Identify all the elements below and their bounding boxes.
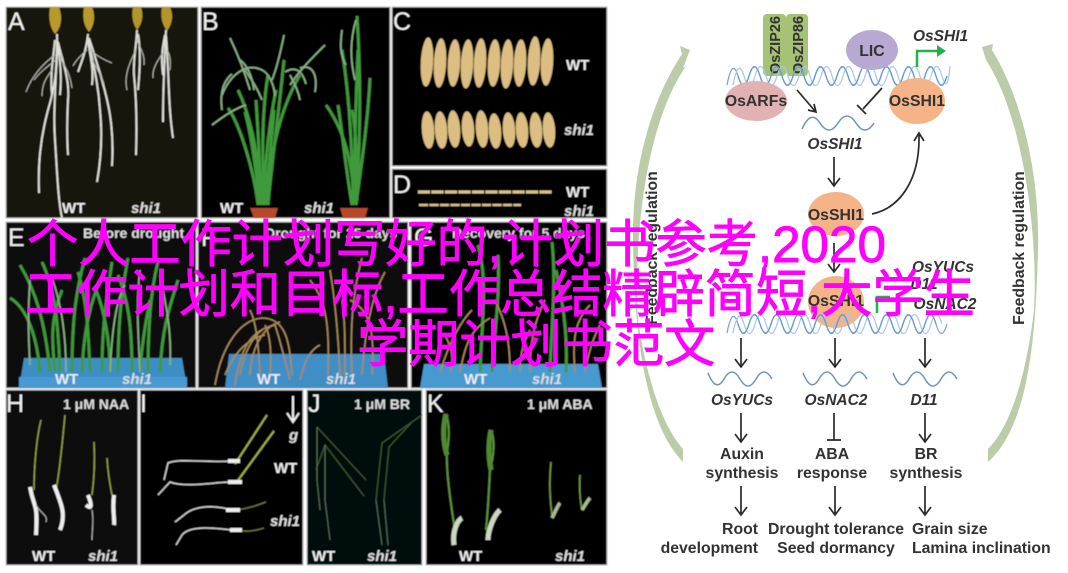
OsSHI1 protein lower (808, 276, 864, 328)
arrow: activation (797, 90, 816, 112)
OsSHI1 protein lower: OsSHI1 (808, 293, 864, 310)
ZIP86 transcription factor (786, 14, 808, 76)
label K: K (427, 390, 444, 418)
label shi1: shi1 (88, 548, 118, 565)
label H: H (6, 390, 24, 418)
label 1 µM BR: 1 μM BR (354, 396, 410, 412)
title overlay (25, 216, 975, 373)
LIC protein (846, 30, 898, 70)
label: Root development: development (661, 540, 759, 557)
label: D11: D11 (910, 392, 938, 409)
panel K: ABA (426, 390, 607, 565)
label C: C (393, 8, 411, 36)
panel E: before drought (6, 222, 196, 388)
arrows: genes to hormones (735, 413, 931, 442)
mRNA wave top (802, 116, 874, 130)
label: BR synthesis: BR (915, 446, 937, 463)
arrows: hormones to traits (735, 486, 931, 515)
label: D11 target: D11 (910, 276, 938, 293)
label F: F (201, 224, 216, 252)
label A: A (8, 8, 25, 36)
label shi1: shi1 (326, 371, 356, 388)
label shi1: shi1 (564, 122, 594, 139)
panel H: NAA (6, 390, 138, 565)
label shi1: shi1 (270, 513, 300, 530)
label: Auxin synthesis: synthesis (706, 465, 779, 482)
arrow: curved feedback (872, 133, 924, 214)
ZIP86 transcription factor: OsZIP86 (791, 16, 807, 74)
label D: D (393, 171, 411, 199)
heading: before drought: Before drought (83, 225, 184, 241)
label WT: WT (55, 371, 78, 388)
title overlay: 工作计划和目标,工作总结精辟简短,大学生 (25, 266, 975, 323)
panel A: root comparison (6, 7, 198, 218)
label: ABA response: response (797, 465, 867, 482)
panel C: grains (392, 7, 607, 166)
label: OsSHI1 mRNA: OsSHI1 (807, 136, 863, 153)
label shi1: shi1 (564, 203, 594, 220)
label WT: WT (62, 200, 85, 217)
label: feedback regulation left: Feedback regulation (644, 171, 661, 325)
arrow: right feedback arc (982, 44, 1038, 462)
ZIP26 transcription factor (763, 14, 786, 76)
title overlay: 学期计划书范文 (357, 316, 715, 373)
panel G: recovery (411, 222, 607, 388)
label 1 µM NAA: 1 μM NAA (63, 396, 129, 412)
mRNA waves (708, 372, 957, 386)
panel F: drought for 25 days (198, 222, 408, 388)
arrow: translation (828, 157, 840, 186)
label WT: WT (220, 200, 243, 217)
heading: drought for 25 days: Drought for 25 days (265, 225, 397, 241)
OsSHI1 protein middle: OsSHI1 (808, 207, 864, 224)
label WT: WT (257, 371, 280, 388)
label: Grain size, Lamina inclination: Grain size (912, 521, 988, 538)
LIC protein: LIC (859, 43, 885, 60)
panel B: whole plants (201, 7, 390, 218)
label WT: WT (566, 57, 589, 74)
label shi1: shi1 (555, 548, 585, 565)
label: BR synthesis: synthesis (890, 465, 963, 482)
label J: J (308, 390, 320, 418)
title overlay: 个人工作计划写好的,计划书参考,2020 (27, 216, 886, 273)
panel I: gravity response (140, 390, 303, 565)
label shi1: shi1 (532, 371, 562, 388)
arrow: protein to nucleus (828, 243, 840, 272)
panel J: BR (307, 390, 422, 565)
label 1 µM ABA: 1 μM ABA (527, 396, 593, 412)
arrow: transcription start (917, 45, 946, 67)
label: OsSHI1 gene: OsSHI1 (913, 28, 968, 45)
OsARFs protein (725, 81, 787, 121)
label: Auxin synthesis: Auxin (720, 446, 764, 463)
label: feedback regulation right: Feedback regulation (1011, 171, 1028, 325)
arrow: inhibition (857, 88, 882, 114)
label: OsYUCs: OsYUCs (711, 392, 773, 409)
OsSHI1 protein middle (808, 192, 864, 236)
upper DNA helix (727, 66, 950, 86)
label WT: WT (566, 184, 589, 201)
heading: recovery for 5 days: Recovery for 5 days (452, 225, 585, 241)
label shi1: shi1 (304, 200, 334, 217)
lower DNA helix (727, 314, 947, 334)
OsSHI1 protein upper (889, 78, 945, 124)
label shi1: shi1 (367, 548, 397, 565)
label WT: WT (32, 548, 55, 565)
label: Drought tolerance, Seed dormancy: Seed dormancy (777, 540, 895, 557)
arrow: gravity direction (287, 396, 299, 422)
arrow: left feedback arc (633, 46, 690, 462)
label: OsNAC2: OsNAC2 (805, 392, 868, 409)
label shi1: shi1 (131, 200, 161, 217)
arrow: lower transcription start (877, 297, 890, 313)
label: Drought tolerance, Seed dormancy: Drought tolerance (768, 521, 904, 538)
OsARFs protein: OsARFs (725, 93, 787, 110)
label: Grain size, Lamina inclination: Lamina inclination (912, 540, 1051, 557)
OsSHI1 protein upper: OsSHI1 (889, 93, 945, 110)
figure: rice phenotype photo panels (6, 7, 607, 565)
ZIP26 transcription factor: OsZIP26 (768, 16, 784, 74)
label I: I (140, 390, 147, 418)
panel D: grain length rows (392, 169, 607, 220)
label WT: WT (274, 460, 297, 477)
label E: E (8, 224, 25, 252)
label WT: WT (459, 548, 482, 565)
label G: G (414, 224, 433, 252)
label: ABA response: ABA (815, 446, 849, 463)
diagram: OsSHI1 regulatory pathway (633, 14, 1051, 557)
label: Root development: Root (722, 521, 758, 538)
label WT: WT (312, 548, 335, 565)
label B: B (202, 8, 219, 36)
label WT: WT (464, 371, 487, 388)
label shi1: shi1 (122, 371, 152, 388)
label: OsNAC2 target: OsNAC2 (914, 296, 977, 313)
label: OsYUCs target: OsYUCs (912, 259, 974, 276)
arrows: DNA to mRNA (735, 338, 931, 367)
label g: g (288, 427, 298, 444)
